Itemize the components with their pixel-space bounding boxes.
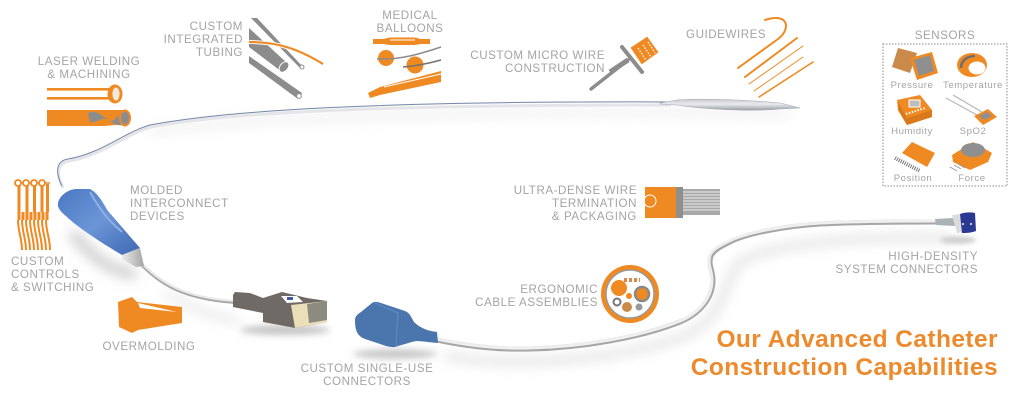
catheter guide line bbox=[58, 99, 800, 188]
lower cable bbox=[143, 221, 937, 349]
sensor: force: Force bbox=[958, 173, 986, 184]
label: ergonomic cable: CABLE ASSEMBLIES bbox=[475, 296, 598, 309]
title: Construction Capabilities bbox=[691, 354, 998, 381]
label: guidewires: GUIDEWIRES bbox=[686, 28, 766, 41]
sensor: spo2: SpO2 bbox=[960, 126, 986, 137]
label: custom integrated tubing: TUBING bbox=[196, 46, 243, 59]
icon: micro wire bbox=[591, 38, 657, 89]
label: high-density: HIGH-DENSITY bbox=[888, 250, 978, 263]
label: molded interconnect: INTERCONNECT bbox=[130, 197, 229, 210]
label: custom integrated tubing: CUSTOM bbox=[190, 20, 243, 33]
connector: high-density bbox=[935, 212, 976, 244]
label: custom micro wire construction: CONSTRUCTION bbox=[505, 62, 605, 75]
label: custom single-use: CONNECTORS bbox=[323, 375, 411, 388]
connector: blue single-use bbox=[353, 302, 438, 359]
label: overmolding: OVERMOLDING bbox=[102, 340, 196, 353]
label: custom micro wire construction: CUSTOM MICRO WIRE bbox=[470, 49, 605, 62]
label: custom controls: CUSTOM bbox=[11, 255, 64, 268]
label: molded interconnect: DEVICES bbox=[130, 210, 185, 223]
connector: grey and cream bbox=[233, 292, 330, 335]
panel: sensors bbox=[883, 29, 1007, 186]
sensor: temperature: Temperature bbox=[943, 80, 1003, 91]
label: ergonomic cable: ERGONOMIC bbox=[520, 283, 598, 296]
sensor: humidity: Humidity bbox=[891, 126, 933, 137]
sensors frame bbox=[883, 44, 1007, 186]
icon: custom controls bbox=[15, 180, 50, 250]
heading: sensors: SENSORS bbox=[915, 29, 975, 42]
label: laser welding: LASER WELDING bbox=[38, 55, 140, 68]
label: high-density: SYSTEM CONNECTORS bbox=[836, 263, 978, 276]
icon: medical balloons bbox=[368, 38, 441, 98]
icon: integrated tubing bbox=[249, 18, 323, 99]
sensor: humidity bbox=[891, 95, 933, 137]
icon: overmolding bbox=[118, 297, 182, 333]
sensor: pressure: Pressure bbox=[891, 80, 933, 91]
label: medical balloons: MEDICAL bbox=[382, 9, 438, 22]
sensor: temperature bbox=[943, 53, 1003, 91]
icon: cable cross-section bbox=[601, 265, 659, 323]
label: molded interconnect: MOLDED bbox=[130, 184, 183, 197]
icon: laser welding bbox=[47, 84, 131, 126]
label: ultra-dense wire: TERMINATION bbox=[552, 197, 637, 210]
sensor: spo2 bbox=[946, 95, 997, 137]
cable shadows bbox=[150, 113, 950, 362]
icon: ultra-dense wire bbox=[644, 187, 720, 218]
label: ultra-dense wire: & PACKAGING bbox=[552, 210, 637, 223]
label: custom integrated tubing: INTEGRATED bbox=[164, 33, 243, 46]
label: custom controls: CONTROLS bbox=[11, 268, 80, 281]
title: Our Advanced Catheter bbox=[716, 326, 998, 353]
guidewire balloon bbox=[660, 99, 800, 110]
sensor: position: Position bbox=[894, 173, 932, 184]
icon: guidewires bbox=[738, 18, 813, 97]
molded interconnect device bbox=[58, 189, 144, 274]
label: custom controls: & SWITCHING bbox=[11, 281, 94, 294]
label: medical balloons: BALLOONS bbox=[377, 22, 443, 35]
sensor: pressure bbox=[891, 48, 938, 91]
sensor: position bbox=[894, 142, 935, 184]
label: ultra-dense wire: ULTRA-DENSE WIRE bbox=[514, 184, 637, 197]
label: laser welding: & MACHINING bbox=[47, 68, 131, 81]
sensor: force bbox=[950, 142, 992, 184]
label: custom single-use: CUSTOM SINGLE-USE bbox=[301, 362, 433, 375]
